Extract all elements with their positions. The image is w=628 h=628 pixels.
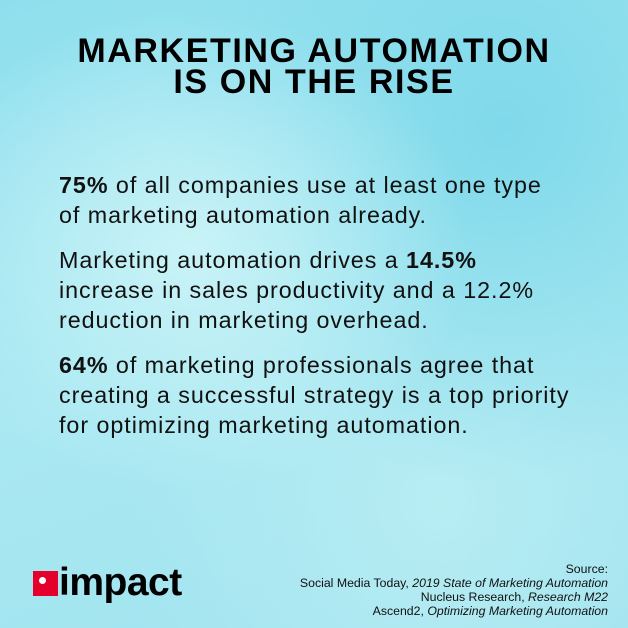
source xyxy=(300,562,608,618)
source: Source: xyxy=(566,562,608,576)
stat 2 xyxy=(59,247,534,333)
stat 3: creating a successful strategy is a top priority xyxy=(59,382,569,408)
title xyxy=(77,32,551,101)
stat 3: for optimizing marketing automation. xyxy=(59,412,469,438)
stat 1 xyxy=(59,172,542,228)
source: Nucleus Research, Research M22 xyxy=(421,590,608,604)
title: IS ON THE RISE xyxy=(173,63,455,101)
icon: red square xyxy=(33,571,58,596)
wordmark: impact xyxy=(59,561,182,604)
stat 2: increase in sales productivity and a 12.2% xyxy=(59,277,534,303)
title: MARKETING AUTOMATION xyxy=(77,32,551,70)
stat 3 xyxy=(59,352,569,438)
source: Ascend2, Optimizing Marketing Automation xyxy=(373,604,608,618)
stat 3: 64% of marketing professionals agree that xyxy=(59,352,534,378)
stat 2: reduction in marketing overhead. xyxy=(59,307,429,333)
stat 1: 75% of all companies use at least one type xyxy=(59,172,542,198)
logo xyxy=(33,561,182,604)
stat 2: Marketing automation drives a 14.5% xyxy=(59,247,477,273)
stat 1: of marketing automation already. xyxy=(59,202,427,228)
source: Social Media Today, 2019 State of Marketing Automation xyxy=(300,576,608,590)
